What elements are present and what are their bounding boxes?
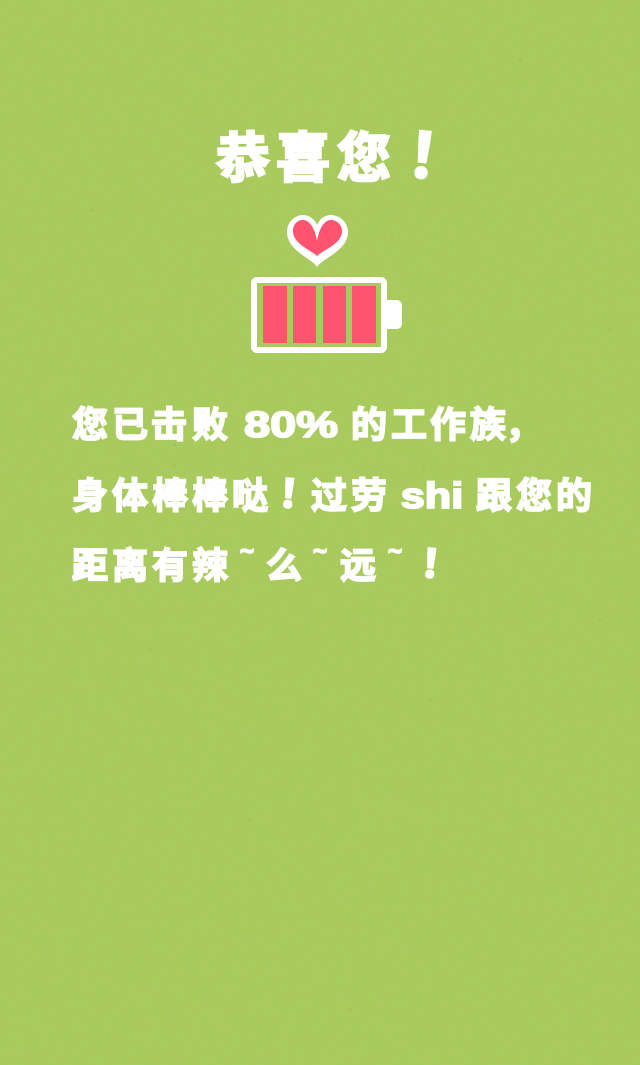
text line 1: 已 [112, 404, 148, 445]
title: 您 [337, 129, 391, 189]
text line 1: 作 [430, 404, 466, 445]
text line 2: 棒 [152, 475, 188, 516]
text line 3 [72, 538, 461, 589]
text line 2: 跟 [476, 475, 512, 516]
text line 2: 体 [112, 475, 148, 516]
text line 2: 身 [72, 475, 108, 516]
title [214, 121, 472, 196]
text line 2: 您 [516, 475, 552, 516]
text line 2: shi [401, 475, 463, 516]
text line 2: 哒 [232, 475, 268, 516]
battery cells [263, 286, 376, 343]
text line 1: 族 [470, 404, 506, 445]
text line 1: 工 [391, 404, 427, 445]
title: ！ [404, 121, 472, 196]
icon: heart above battery [287, 215, 348, 267]
text line 1: 的 [351, 404, 387, 445]
title: 喜 [276, 129, 330, 189]
text line 3: ~ [388, 538, 402, 565]
battery terminal [386, 300, 402, 329]
text line 3: ~ [240, 538, 254, 565]
text line 2 [72, 473, 592, 519]
text line 3: ~ [313, 538, 327, 565]
text line 2: 的 [556, 475, 592, 516]
title: 恭 [215, 128, 271, 190]
text line 1: 80% [244, 404, 338, 445]
text line 1: ， [505, 404, 541, 445]
text line 2: 过 [311, 475, 347, 516]
text line 3: 有 [152, 545, 188, 586]
text line 2: 棒 [192, 475, 228, 516]
text line 1 [72, 404, 541, 445]
text line 2: ！ [277, 473, 319, 519]
text line 1: 击 [151, 404, 187, 445]
text line 3: 辣 [192, 545, 228, 586]
text line 1: 您 [72, 404, 108, 445]
text line 2: 劳 [351, 475, 387, 516]
text line 3: ！ [419, 543, 461, 589]
text line 3: 距 [72, 545, 108, 586]
text line 3: 远 [340, 545, 376, 586]
icon: battery at 80 percent [251, 277, 402, 353]
text line 1: 败 [192, 404, 228, 445]
text line 3: 么 [266, 545, 302, 586]
battery casing [254, 280, 384, 350]
text line 3: 离 [112, 545, 148, 586]
